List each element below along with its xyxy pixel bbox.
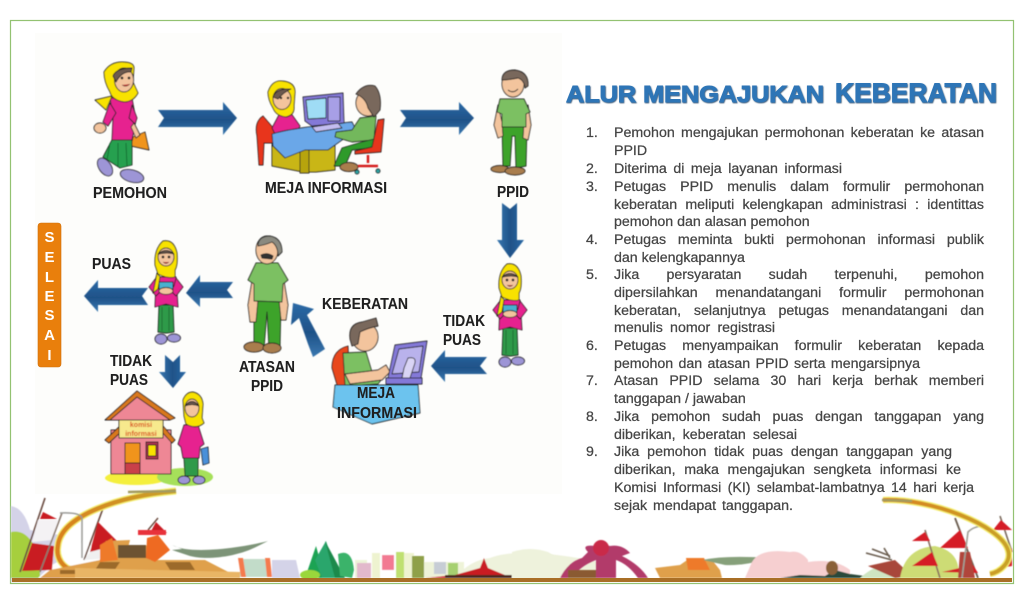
- step 9: [586, 444, 974, 514]
- panel: selesai: L: [45, 269, 54, 286]
- arrow: pemohon to selesai: [84, 280, 148, 312]
- label: komisi informasi sign: komisi: [130, 422, 152, 429]
- step 7: [586, 373, 984, 407]
- arrow: meja informasi to atasan PPID: [291, 303, 325, 357]
- icon: PPID officer: [491, 70, 531, 175]
- text block: numbered steps: Atasan PPID selama 30 hari kerja berhak memberi: [614, 373, 984, 389]
- text block: numbered steps: diberikan, keberatan selesai: [614, 426, 797, 442]
- illustration: flow diagram: [84, 62, 531, 486]
- text block: numbered steps: Jika persyaratan sudah terpenuhi, pemohon: [614, 267, 984, 283]
- text block: numbered steps: pemohon dan atasan PPID serta mengarsipnya: [614, 356, 920, 372]
- text block: numbered steps: sejak mendapat tanggapan.: [614, 498, 793, 514]
- icon: pemohon holding document, puas: [149, 241, 183, 344]
- flow labels: ATASAN: [239, 359, 295, 376]
- arrow: meja informasi to PPID: [400, 102, 474, 135]
- text block: numbered steps: diberikan, maka mengajukan sengketa informasi ke: [614, 462, 961, 478]
- text block: numbered steps: 3.: [586, 179, 598, 195]
- text block: numbered steps: 4.: [586, 232, 598, 248]
- text block: numbered steps: pemohon dan alasan pemohon: [614, 214, 810, 230]
- step 3: [586, 179, 984, 230]
- text block: numbered steps: Pemohon mengajukan permohonan keberatan ke atasan: [614, 125, 984, 141]
- step 8: [586, 409, 984, 442]
- icon: pemohon woman walking: [94, 62, 149, 185]
- icon: pemohon holding document, tidak puas: [493, 264, 527, 367]
- icon: atasan PPID officer: [244, 236, 288, 353]
- flow labels: KEBERATAN: [322, 296, 408, 313]
- panel: flow diagram background: [35, 33, 562, 494]
- flow labels: TIDAK: [110, 353, 153, 370]
- arrow: pemohon to meja informasi bawah: [431, 350, 487, 382]
- step 2: [586, 161, 842, 177]
- text block: numbered steps: 1.: [586, 125, 598, 141]
- icon: meja informasi bawah: [332, 318, 427, 424]
- panel: selesai: A: [44, 327, 55, 344]
- text block: numbered steps: 6.: [586, 338, 598, 354]
- text block: numbered steps: PPID: [614, 143, 647, 159]
- flow labels: MEJA: [357, 385, 395, 402]
- arrow: atasan PPID to pemohon: [186, 275, 233, 307]
- panel: selesai: [38, 223, 61, 367]
- arrow: pemohon down to komisi informasi: [159, 355, 186, 388]
- step 1: [586, 125, 984, 159]
- text block: numbered steps: dan kelengkapannya: [614, 250, 745, 266]
- text block: numbered steps: Petugas menyampaikan formulir keberatan kepada: [614, 338, 984, 354]
- text block: numbered steps: tanggapan / jawaban: [614, 391, 746, 407]
- text block: numbered steps: Jika pemohon tidak puas dengan tanggapan yang: [614, 444, 952, 460]
- illustration: bottom landscape right: [512, 500, 1012, 578]
- flow labels: TIDAK: [443, 313, 486, 330]
- text block: numbered steps: Petugas PPID menulis dalam formulir permohonan: [614, 179, 984, 195]
- title: ALUR MENGAJUKAN: [566, 81, 824, 107]
- icon: meja informasi service desk: [256, 81, 384, 174]
- text block: numbered steps: 8.: [586, 409, 598, 425]
- flow labels: PPID: [497, 184, 529, 201]
- text block: numbered steps: keberatan, selanjutnya petugas menandatangani dan: [614, 302, 984, 318]
- text block: numbered steps: 9.: [586, 444, 598, 460]
- flow labels: PUAS: [443, 332, 481, 349]
- icon: komisi informasi building with pemohon: [105, 391, 213, 486]
- flow labels: PPID: [251, 378, 283, 395]
- text block: numbered steps: 7.: [586, 373, 598, 389]
- panel: selesai: I: [47, 347, 52, 364]
- arrow: pemohon to meja informasi: [158, 102, 237, 135]
- text block: numbered steps: Petugas meminta bukti permohonan informasi publik: [614, 232, 984, 248]
- text block: numbered steps: keberatan meliputi kelengkapan administrasi : identittas: [614, 196, 984, 212]
- flow labels: PEMOHON: [93, 185, 167, 202]
- panel: selesai: E: [44, 288, 55, 305]
- arrow: PPID down to pemohon: [497, 203, 524, 258]
- panel: selesai: S: [44, 229, 55, 246]
- label: komisi informasi sign: informasi: [125, 431, 157, 438]
- text block: numbered steps: Komisi Informasi (KI) selambat-lambatnya 14 hari kerja: [614, 480, 974, 496]
- step 4: [586, 232, 984, 266]
- text block: numbered steps: menulis nomor registrasi: [614, 320, 775, 336]
- illustration: bottom landscape left: [11, 491, 600, 582]
- flow labels: [92, 180, 529, 422]
- title: KEBERATAN: [835, 78, 997, 108]
- text block: numbered steps: Diterima di meja layanan informasi: [614, 161, 842, 177]
- text block: numbered steps: 5.: [586, 267, 598, 283]
- label: komisi informasi sign: [125, 422, 157, 438]
- text block: numbered steps: dipersilahkan menandatangani formulir permohonan: [614, 285, 984, 301]
- text block: numbered steps: 2.: [586, 161, 598, 177]
- flow labels: PUAS: [92, 256, 131, 273]
- step 6: [586, 338, 984, 372]
- text block: numbered steps: [586, 125, 984, 514]
- title: [566, 78, 997, 108]
- flow labels: MEJA INFORMASI: [265, 180, 387, 197]
- flow labels: PUAS: [110, 372, 148, 389]
- text block: numbered steps: Jika pemohon sudah puas dengan tanggapan yang: [614, 409, 984, 425]
- step 5: [586, 267, 984, 336]
- ground strip: [12, 578, 1012, 582]
- panel: selesai: S: [44, 307, 55, 324]
- flow labels: INFORMASI: [337, 405, 417, 422]
- panel: selesai: E: [44, 249, 55, 266]
